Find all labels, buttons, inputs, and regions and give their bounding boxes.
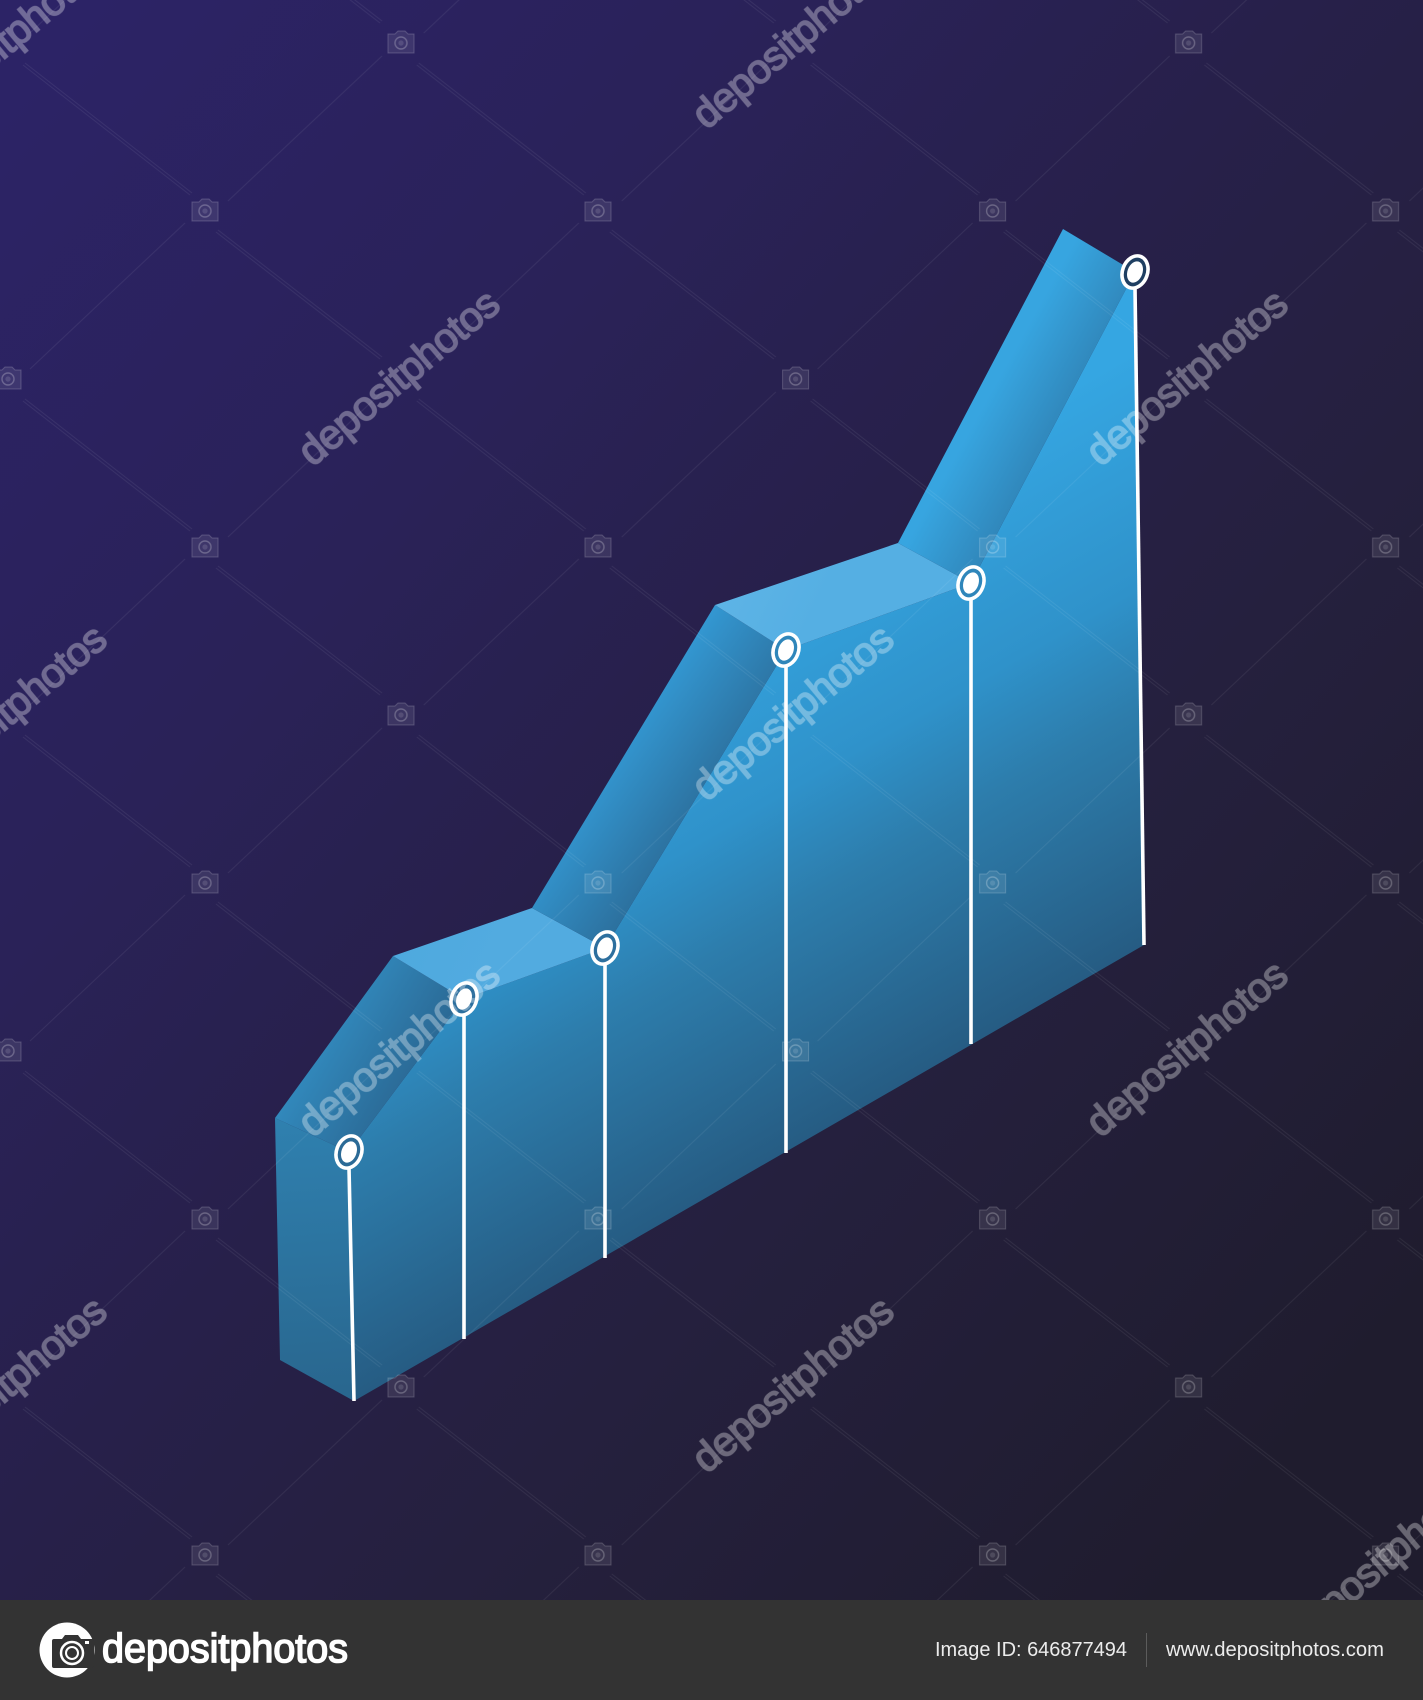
left side face (275, 1118, 354, 1401)
marker 6 (1118, 252, 1152, 292)
watermark text: depositphotos (289, 280, 508, 474)
front face (349, 272, 1144, 1401)
marker 1 (332, 1132, 366, 1172)
watermark text: depositphotos (1077, 280, 1296, 474)
rising face 1 (275, 956, 464, 1152)
marker stems (349, 288, 1144, 1401)
rising face 3 (898, 229, 1135, 583)
plateau face 2 (715, 543, 971, 650)
footer bar (0, 1600, 1423, 1700)
watermark text: depositphotos (683, 615, 902, 809)
watermark text: depositphotos (289, 951, 508, 1145)
marker 4 (769, 630, 803, 670)
data markers (332, 252, 1152, 1172)
watermark text: depositphotos (683, 1287, 902, 1481)
logo wordmark: depositphotos (102, 1625, 348, 1671)
marker 3 (588, 928, 622, 968)
rising face 2 (532, 605, 786, 948)
area chart (275, 229, 1152, 1401)
plateau face 1 (393, 908, 605, 999)
marker 2 (447, 979, 481, 1019)
marker 5 (954, 563, 988, 603)
watermark text: depositphotos (1077, 951, 1296, 1145)
website: www.depositphotos.com (1165, 1639, 1384, 1661)
icon: camera logo (40, 1622, 94, 1678)
image id: Image ID: 646877494 (935, 1639, 1127, 1661)
